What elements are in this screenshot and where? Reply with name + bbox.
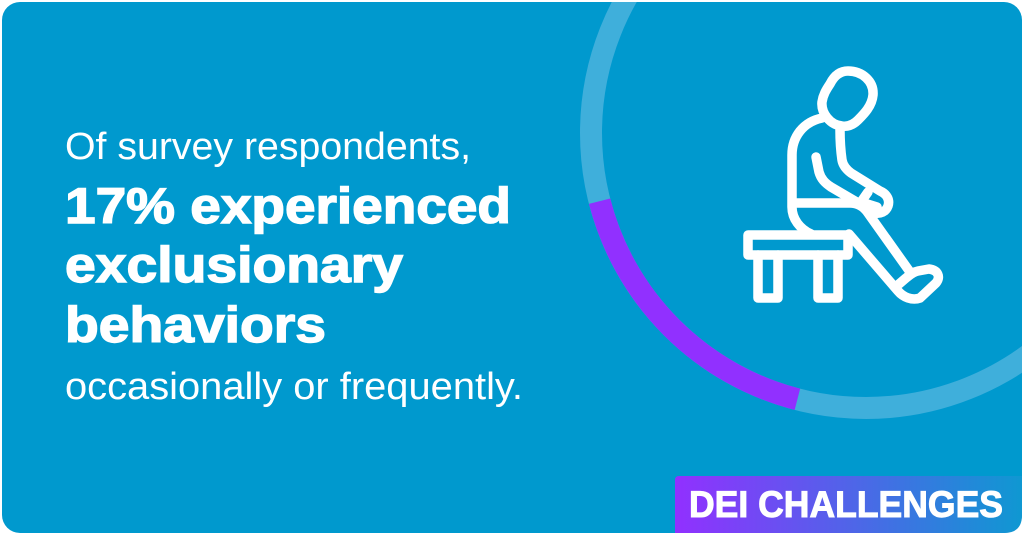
torso and back (792, 118, 822, 234)
waist and upper leg (795, 203, 910, 272)
closing line: occasionally or frequently. (65, 366, 523, 408)
tag label: DEI CHALLENGES (689, 484, 1003, 525)
tag: DEI Challenges (675, 476, 1022, 533)
bold line 2: exclusionary (65, 237, 403, 293)
ring track (591, 0, 1024, 408)
icon: person sitting on bench (748, 71, 938, 299)
tag background (675, 476, 1022, 533)
bold line 3: behaviors (65, 297, 326, 353)
bench left leg (758, 255, 778, 298)
bench right leg (818, 255, 838, 298)
text block: headline statement (65, 126, 523, 408)
bench top (748, 235, 848, 255)
hand (861, 192, 877, 207)
bold line 1: 17% experienced (65, 178, 511, 234)
inner arm (816, 157, 860, 204)
front of chest (840, 130, 889, 213)
donut chart: 17 percent ring (591, 0, 1024, 408)
intro line: Of survey respondents, (65, 126, 471, 168)
head (822, 71, 873, 126)
lower leg and foot (849, 234, 938, 299)
ring segment: 17 percent highlighted (600, 201, 797, 399)
